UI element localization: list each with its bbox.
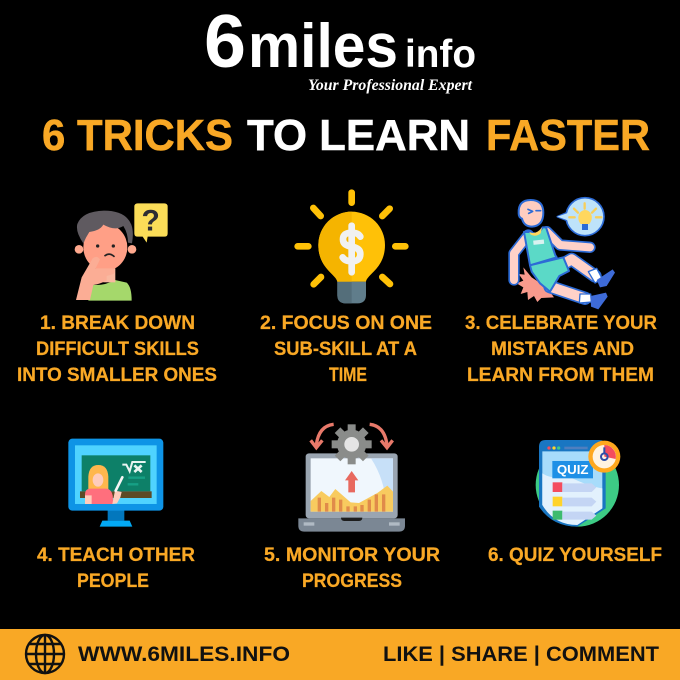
panel: trick 3	[465, 198, 657, 386]
label: trick 6: 6. QUIZ YOURSELF	[488, 545, 662, 566]
icon: thinking person	[75, 203, 168, 301]
label: trick 4	[37, 545, 195, 592]
label: trick 3: MISTAKES AND	[491, 339, 634, 360]
logo: miles	[248, 12, 398, 81]
panel: trick 1	[17, 203, 217, 386]
icon: thinking person: ?	[141, 205, 160, 238]
label: trick 1: DIFFICULT SKILLS	[36, 339, 199, 360]
title: 6 TRICKS	[42, 111, 233, 160]
label: trick 5: 5. MONITOR YOUR	[264, 545, 440, 566]
icon: laptop with progress chart	[298, 424, 405, 532]
icon: falling player with idea	[514, 198, 615, 309]
label: trick 3: LEARN FROM THEM	[467, 365, 654, 386]
label: trick 2	[260, 313, 432, 386]
title	[42, 111, 650, 160]
label: trick 5: PROGRESS	[302, 571, 402, 592]
label: trick 4: PEOPLE	[77, 571, 149, 592]
panel: trick 2	[260, 193, 432, 386]
label: trick 4: 4. TEACH OTHER	[37, 545, 195, 566]
icon: light bulb with dollar	[298, 193, 405, 303]
label: trick 5	[264, 545, 440, 592]
label: trick 1: INTO SMALLER ONES	[17, 365, 217, 386]
icon: quiz screen with timer: QUIZ	[557, 463, 589, 477]
label: trick 1: 1. BREAK DOWN	[40, 313, 195, 334]
panel: trick 5	[264, 424, 440, 592]
label: trick 2: SUB-SKILL AT A	[274, 339, 417, 360]
footer bar	[0, 629, 680, 680]
label: trick 2: TIME	[329, 365, 367, 386]
label: trick 3: 3. CELEBRATE YOUR	[465, 313, 657, 334]
website url: WWW.6MILES.INFO	[78, 642, 290, 666]
icon: quiz screen with timer	[536, 440, 620, 527]
title: FASTER	[486, 111, 650, 160]
call to action: LIKE | SHARE | COMMENT	[383, 642, 659, 666]
label: trick 1	[17, 313, 217, 386]
logo: info	[405, 33, 476, 76]
label: trick 3	[465, 313, 657, 386]
icon: globe	[26, 635, 64, 673]
panel: trick 6	[488, 440, 662, 566]
icon: teacher on monitor	[68, 439, 163, 527]
logo: 6	[204, 0, 246, 83]
panel: trick 4	[37, 439, 195, 592]
logo	[204, 0, 476, 94]
label: trick 2: 2. FOCUS ON ONE	[260, 313, 432, 334]
logo: Your Professional Expert	[308, 77, 473, 94]
title: TO LEARN	[247, 111, 470, 160]
